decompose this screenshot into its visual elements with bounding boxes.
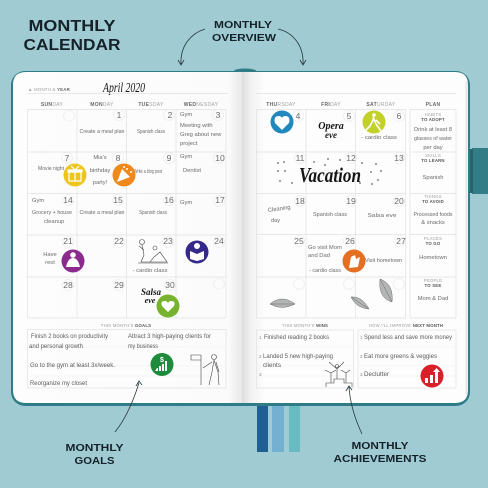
note: cardio class: - cardio class bbox=[361, 135, 397, 141]
date numbers left: 10 bbox=[215, 153, 225, 163]
date numbers left: 16 bbox=[164, 195, 174, 205]
date numbers left: 9 bbox=[167, 153, 172, 163]
arrow: to wins bbox=[346, 386, 362, 434]
panel: this month's goals: my business bbox=[128, 343, 158, 350]
panel: this month's wins: clients bbox=[263, 362, 281, 369]
date numbers right: 11 bbox=[296, 153, 305, 163]
label: monthly goals bbox=[66, 442, 124, 467]
right page edge bbox=[466, 82, 468, 394]
date numbers right: 19 bbox=[346, 196, 356, 206]
weekday headers right bbox=[256, 94, 456, 108]
date numbers left: 17 bbox=[215, 195, 225, 205]
vacation script with dots: Vacation bbox=[299, 163, 361, 187]
date numbers left: 24 bbox=[214, 236, 224, 246]
panel: how i'll improve next month: 2 bbox=[360, 354, 363, 359]
note: opera eve: eve bbox=[325, 130, 337, 140]
note: salsa eve: eve bbox=[145, 296, 156, 305]
handwritten entries left: cleanup bbox=[44, 219, 64, 225]
panel: this month's wins bbox=[256, 323, 354, 388]
sketch: leaves bbox=[270, 279, 392, 309]
panel: how i'll improve next month: 3 bbox=[360, 372, 363, 377]
note: opera eve: Opera bbox=[318, 121, 344, 132]
handwritten entries left: Mia's bbox=[93, 155, 107, 161]
weekday headers right: PLAN bbox=[426, 102, 440, 108]
panel: plan column entries: PEOPLE bbox=[424, 278, 442, 283]
panel: plan column entries: HABITS bbox=[425, 112, 441, 117]
panel: this month's wins: 1 bbox=[259, 335, 262, 340]
label: monthly achievements: ACHIEVEMENTS bbox=[334, 453, 426, 465]
handwritten entries right: - cardio class bbox=[309, 268, 341, 274]
title second line: CALENDAR bbox=[24, 37, 121, 54]
panel: this month's goals: Finish 2 books on productivity bbox=[31, 333, 109, 340]
label: monthly achievements: MONTHLY bbox=[352, 440, 408, 452]
note: salsa eve: Salsa bbox=[141, 287, 162, 297]
left page bbox=[13, 72, 242, 403]
handwritten entries left: Have bbox=[43, 252, 57, 258]
panel: plan column entries: Processed foods bbox=[414, 212, 453, 218]
icon: lime exercise bbox=[362, 110, 386, 134]
weekday headers right: THURSDAY bbox=[266, 102, 296, 108]
handwritten entries left: rest bbox=[45, 260, 55, 266]
panel: plan column entries: PLACES bbox=[424, 236, 442, 241]
panel: plan column entries: Mom & Dad bbox=[418, 296, 448, 302]
ribbon bookmarks bbox=[257, 400, 300, 452]
handwritten entries right: Go visit Mom bbox=[308, 245, 342, 251]
handwritten entries right: Cleaning bbox=[267, 205, 291, 214]
vacation script with dots bbox=[277, 158, 382, 187]
panel: how i'll improve next month: HOW I'LL IMPROVE NEXT MONTH bbox=[369, 323, 443, 328]
date numbers left: 22 bbox=[114, 236, 124, 246]
notebook cover bbox=[11, 68, 488, 406]
panel: month header: April 2020 bbox=[102, 81, 145, 96]
panel: this month's wins: Landed 5 new high-paying bbox=[263, 353, 333, 360]
panel: this month's goals bbox=[28, 323, 226, 388]
label: monthly achievements bbox=[334, 440, 426, 465]
panel: plan column entries: Drink at least 8 bbox=[414, 127, 452, 133]
heading: monthly overview bbox=[212, 19, 276, 44]
handwritten entries left: Create a meal plan bbox=[80, 210, 124, 216]
arrow: overview to right page bbox=[278, 29, 306, 65]
date numbers left: 23 bbox=[163, 236, 173, 246]
date numbers left: 8 bbox=[116, 153, 121, 163]
handwritten entries right bbox=[267, 205, 402, 274]
arrow: overview to left page bbox=[178, 29, 205, 65]
panel: how i'll improve next month: Spend less and save more money bbox=[364, 334, 453, 341]
label: monthly goals: MONTHLY bbox=[66, 442, 124, 454]
date numbers left: 21 bbox=[63, 236, 73, 246]
panel: plan column entries bbox=[414, 112, 453, 302]
icon: growth money bbox=[150, 353, 174, 376]
handwritten entries left: Grocery + house bbox=[32, 210, 72, 216]
icon: gift bbox=[64, 164, 86, 186]
icon: party popper bbox=[112, 164, 136, 186]
handwritten entries left: Gym bbox=[180, 200, 192, 206]
note: salsa eve bbox=[141, 287, 162, 305]
weekday headers left: TUESDAY bbox=[138, 102, 164, 108]
panel: how i'll improve next month: Eat more greens & veggies bbox=[364, 353, 437, 360]
icon: red growth bbox=[420, 364, 444, 388]
panel: plan column entries: & snacks bbox=[421, 220, 445, 226]
date numbers right: 25 bbox=[294, 236, 304, 246]
panel: how i'll improve next month: 1 bbox=[360, 335, 363, 340]
weekday headers left: MONDAY bbox=[90, 102, 114, 108]
date numbers left: 29 bbox=[114, 280, 124, 290]
panel: plan column entries: per day bbox=[423, 145, 443, 151]
icon: green heart bbox=[156, 294, 180, 318]
panel: plan column entries: TO GO bbox=[426, 241, 441, 246]
date numbers right: 26 bbox=[345, 236, 355, 246]
panel: plan column entries: glasses of water bbox=[414, 136, 452, 142]
handwritten entries left: Create a meal plan bbox=[80, 129, 124, 135]
panel: month header: ▲ MONTH & YEAR bbox=[28, 87, 71, 92]
date numbers right: 20 bbox=[394, 196, 404, 206]
date numbers right: 18 bbox=[295, 196, 305, 206]
heading: monthly overview: MONTHLY bbox=[214, 19, 272, 31]
handwritten entries left: Dentist bbox=[183, 168, 201, 174]
icon: growth money: $ bbox=[160, 357, 164, 364]
panel: this month's wins: Finished reading 2 books bbox=[264, 334, 329, 341]
panel: plan column entries: TO LEARN bbox=[421, 158, 445, 163]
icon: blue heart bbox=[270, 110, 294, 134]
panel: how i'll improve next month bbox=[358, 323, 456, 388]
handwritten entries left: Gym bbox=[180, 154, 192, 160]
sketch: yoga figure bbox=[138, 240, 168, 263]
handwritten entries right: Salsa eve bbox=[368, 213, 396, 219]
date numbers left: 1 bbox=[117, 110, 122, 120]
handwritten entries right: day bbox=[271, 218, 280, 224]
icon: orange travel bbox=[342, 250, 366, 272]
handwritten entries left: Movie night bbox=[38, 166, 64, 172]
title: MONTHLY bbox=[28, 18, 116, 35]
handwritten entries left: - cardio class bbox=[132, 268, 168, 274]
panel: this month's goals: Reorganize my closet bbox=[30, 380, 87, 387]
note: opera eve bbox=[318, 121, 344, 140]
sketch: figure with flag bbox=[191, 354, 219, 385]
panel: this month's wins: 3 bbox=[259, 372, 262, 377]
panel: month header bbox=[27, 81, 228, 96]
calendar grid right bbox=[256, 110, 406, 318]
date bubbles right bbox=[292, 110, 404, 290]
panel: this month's goals: Go to the gym at least 3x/week. bbox=[30, 362, 115, 369]
handwritten entries right: Visit hometown bbox=[365, 258, 402, 264]
handwritten entries left: Gym bbox=[180, 112, 192, 118]
date numbers left: 15 bbox=[113, 195, 123, 205]
panel: plan column entries: Spanish bbox=[423, 175, 443, 181]
label: monthly goals: GOALS bbox=[74, 455, 114, 467]
heading: monthly overview: OVERVIEW bbox=[212, 32, 276, 44]
icon: reader bbox=[186, 240, 208, 264]
right page bbox=[242, 72, 468, 403]
panel: this month's goals: and personal growth bbox=[29, 343, 83, 350]
date numbers left: 14 bbox=[63, 195, 73, 205]
sketch: podium figures bbox=[325, 362, 352, 387]
calendar grid left bbox=[28, 110, 226, 318]
panel: plan column entries: TO AVOID bbox=[422, 199, 444, 204]
weekday headers left: WEDNESDAY bbox=[184, 102, 219, 108]
date numbers right: 13 bbox=[394, 153, 404, 163]
weekday headers left: SUNDAY bbox=[41, 102, 64, 108]
handwritten entries left: Greg about new bbox=[180, 132, 222, 138]
date numbers right: 12 bbox=[346, 153, 356, 163]
panel: plan column entries: Hometown bbox=[419, 255, 447, 261]
panel: this month's goals: Attract 3 high-paying clients for bbox=[128, 333, 211, 340]
handwritten entries left: Meeting with bbox=[180, 123, 213, 129]
panel: how i'll improve next month: Declutter bbox=[364, 371, 389, 378]
panel: this month's goals: THIS MONTH'S GOALS bbox=[101, 323, 151, 328]
date bubbles left bbox=[62, 110, 224, 290]
handwritten entries left: Spanish class bbox=[139, 210, 167, 216]
weekday headers right: FRIDAY bbox=[321, 102, 341, 108]
panel: plan column entries: THINGS bbox=[424, 194, 442, 199]
date numbers left: 2 bbox=[168, 110, 173, 120]
handwritten entries left: Write a blog post bbox=[134, 169, 162, 175]
plan column grid bbox=[410, 110, 456, 318]
handwritten entries right: and Dad bbox=[308, 253, 330, 259]
handwritten entries left: party! bbox=[93, 180, 108, 186]
handwritten entries left: Gym bbox=[32, 198, 44, 204]
date numbers left bbox=[63, 110, 225, 290]
handwritten entries left: project bbox=[180, 141, 198, 147]
panel: plan column entries: TO SEE bbox=[425, 283, 441, 288]
arrow: to goals bbox=[115, 381, 142, 432]
weekday headers right: SATURDAY bbox=[366, 102, 396, 108]
panel: plan column entries: TO ADOPT bbox=[421, 117, 445, 122]
date numbers left: 28 bbox=[63, 280, 73, 290]
panel: plan column entries: SKILLS bbox=[425, 153, 441, 158]
date numbers right bbox=[294, 111, 406, 246]
date numbers right: 27 bbox=[396, 236, 406, 246]
handwritten entries left bbox=[32, 112, 222, 274]
date numbers left: 30 bbox=[165, 280, 175, 290]
date numbers right: 5 bbox=[347, 111, 352, 121]
weekday headers left bbox=[41, 102, 219, 108]
date numbers left: 7 bbox=[65, 153, 70, 163]
handwritten entries right: Spanish class bbox=[313, 212, 347, 218]
handwritten entries left: birthday bbox=[90, 168, 110, 174]
date numbers left: 3 bbox=[216, 110, 221, 120]
handwritten entries left: Spanish class bbox=[137, 129, 165, 135]
date numbers right: 6 bbox=[397, 111, 402, 121]
icon: meditation bbox=[62, 250, 84, 272]
panel: this month's wins: 2 bbox=[259, 354, 262, 359]
date numbers right: 4 bbox=[296, 111, 301, 121]
panel: this month's wins: THIS MONTH'S WINS bbox=[282, 323, 328, 328]
